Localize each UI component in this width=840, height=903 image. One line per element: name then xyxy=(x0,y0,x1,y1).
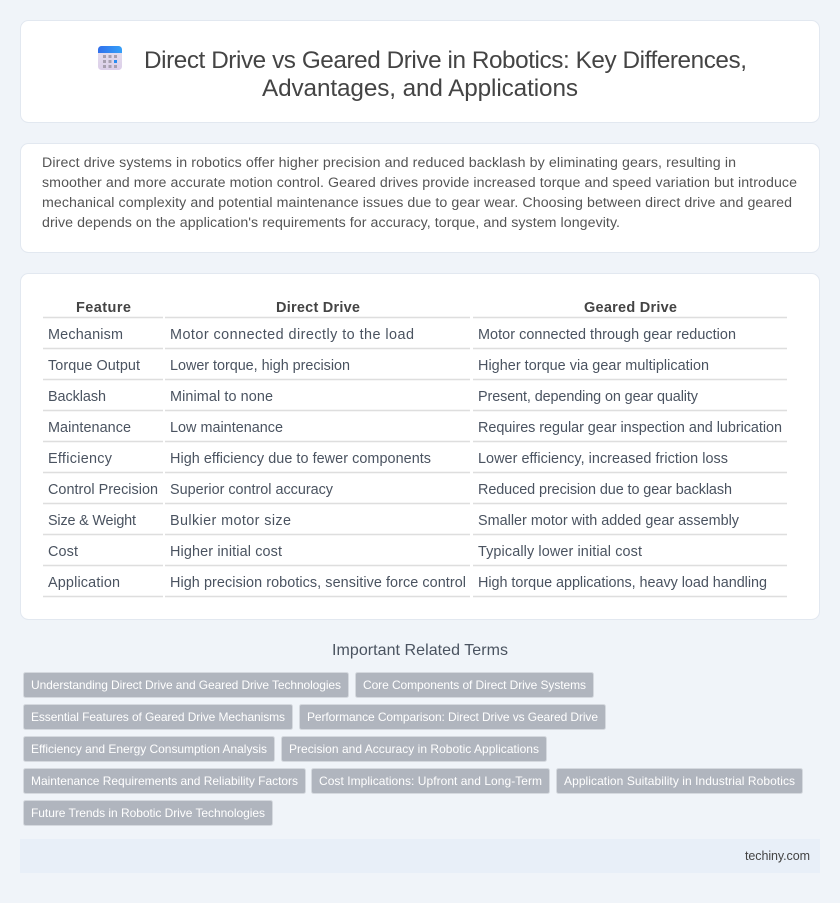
table header: Feature xyxy=(76,300,131,316)
row: size and weight: Smaller motor with added gear assembly xyxy=(478,513,740,529)
tag: Application Suitability in Industrial Robotics xyxy=(564,774,795,788)
row: maintenance: Low maintenance xyxy=(170,420,283,436)
panel: comparison table xyxy=(20,274,820,620)
tag xyxy=(356,672,594,698)
row: application xyxy=(48,575,767,591)
row: size and weight: Bulkier motor size xyxy=(170,513,291,529)
tag xyxy=(24,672,348,698)
panel: introduction text: Direct drive systems in robotics offer higher precision and reduced backlash by eliminating gears, resulting in xyxy=(42,155,736,171)
row: maintenance: Maintenance xyxy=(48,420,131,436)
row: torque output: Torque Output xyxy=(48,358,140,374)
footer xyxy=(20,839,820,873)
row: application: Application xyxy=(48,575,120,591)
row: cost xyxy=(48,544,642,560)
row: size and weight xyxy=(48,513,740,529)
table header: Direct Drive xyxy=(276,300,360,316)
row: efficiency: Efficiency xyxy=(48,451,113,467)
table header xyxy=(76,300,677,316)
panel: related term tags xyxy=(24,672,802,826)
row: efficiency: Lower efficiency, increased friction loss xyxy=(478,451,728,467)
row: control precision xyxy=(48,482,732,498)
heading: important related terms: Important Related Terms xyxy=(332,642,508,659)
row: cost: Higher initial cost xyxy=(170,544,282,560)
tag xyxy=(282,736,546,762)
row: efficiency xyxy=(48,451,728,467)
row: backlash: Backlash xyxy=(48,389,106,405)
row: mechanism: Motor connected directly to the load xyxy=(170,327,414,343)
panel: title card xyxy=(20,20,820,122)
tag xyxy=(300,704,606,730)
row: torque output: Higher torque via gear multiplication xyxy=(478,358,709,374)
panel: introduction text xyxy=(20,144,820,252)
row: control precision: Control Precision xyxy=(48,482,158,498)
title: Direct Drive vs Geared Drive in Robotics: Key Differences, xyxy=(144,47,747,74)
panel: introduction text: drive depends on the application's requirements for accuracy, torque, and system longevity. xyxy=(42,215,620,231)
tag: Efficiency and Energy Consumption Analysis xyxy=(31,742,267,756)
tag: Future Trends in Robotic Drive Technologies xyxy=(31,806,265,820)
tag: Core Components of Direct Drive Systems xyxy=(363,678,586,692)
row: application: High torque applications, heavy load handling xyxy=(478,575,767,591)
row: mechanism: Mechanism xyxy=(48,327,123,343)
row: cost: Typically lower initial cost xyxy=(478,544,642,560)
tag xyxy=(24,800,272,826)
panel: introduction text: mechanical complexity and potential maintenance issues due to gear wear. Choosing between direct drive and geared xyxy=(42,195,792,211)
row: efficiency: High efficiency due to fewer components xyxy=(170,451,431,467)
row: maintenance xyxy=(48,420,782,436)
tag: Precision and Accuracy in Robotic Applications xyxy=(289,742,539,756)
table header: Geared Drive xyxy=(584,300,677,316)
title: Advantages, and Applications xyxy=(262,75,578,102)
row: backlash: Present, depending on gear quality xyxy=(478,389,699,405)
tag: Understanding Direct Drive and Geared Drive Technologies xyxy=(31,678,341,692)
row: cost: Cost xyxy=(48,544,78,560)
row: torque output: Lower torque, high precision xyxy=(170,358,350,374)
tag xyxy=(24,768,306,794)
row: application: High precision robotics, sensitive force control xyxy=(170,575,466,591)
row: mechanism: Motor connected through gear reduction xyxy=(478,327,736,343)
icon: calendar grid xyxy=(98,46,122,70)
tag: Maintenance Requirements and Reliability Factors xyxy=(31,774,298,788)
row: backlash: Minimal to none xyxy=(170,389,273,405)
tag: Cost Implications: Upfront and Long-Term xyxy=(319,774,542,788)
title xyxy=(144,47,747,102)
row: backlash xyxy=(48,389,699,405)
footer: techiny.com xyxy=(745,849,810,863)
row: control precision: Reduced precision due to gear backlash xyxy=(478,482,732,498)
panel: introduction text: smoother and more accurate motion control. Geared drives provide increased torque and speed variation but introduce xyxy=(42,175,797,191)
row: control precision: Superior control accuracy xyxy=(170,482,334,498)
row: size and weight: Size & Weight xyxy=(48,513,136,529)
tag xyxy=(312,768,550,794)
row: maintenance: Requires regular gear inspection and lubrication xyxy=(478,420,782,436)
tag xyxy=(24,736,274,762)
tag xyxy=(556,768,802,794)
tag xyxy=(24,704,292,730)
tag: Essential Features of Geared Drive Mechanisms xyxy=(31,710,285,724)
row: mechanism xyxy=(48,327,736,343)
row: torque output xyxy=(48,358,709,374)
tag: Performance Comparison: Direct Drive vs Geared Drive xyxy=(307,710,598,724)
